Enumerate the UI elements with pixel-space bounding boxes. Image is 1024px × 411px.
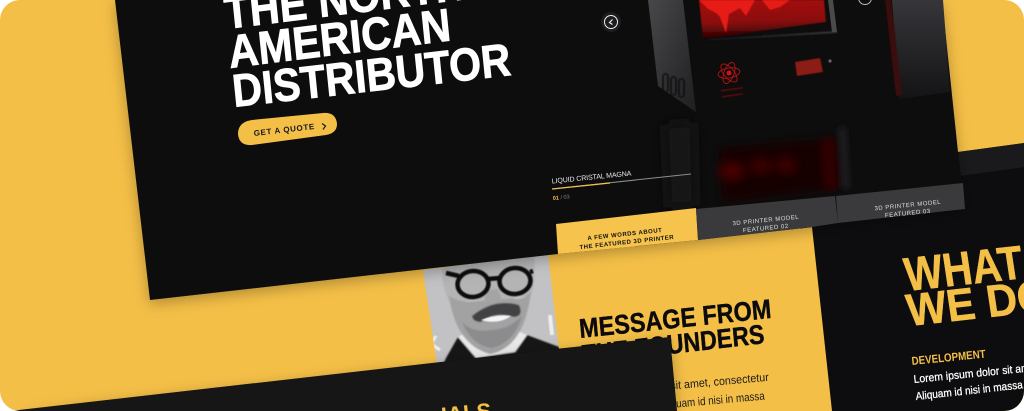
moustache	[472, 303, 521, 322]
printer side face	[648, 0, 696, 112]
nose shadow	[484, 289, 501, 300]
slider previous arrow	[601, 12, 621, 32]
hero heading	[222, 0, 513, 117]
logo caption	[721, 87, 743, 98]
jacket	[444, 334, 559, 362]
hero heading: DISTRIBUTOR	[230, 33, 513, 117]
red resin window	[699, 0, 826, 39]
white page marks	[431, 336, 440, 350]
text block: development copy	[914, 365, 1024, 401]
beard	[449, 292, 531, 354]
text block: founders copy: dolor sit amet, consectetur	[643, 372, 769, 395]
slider next arrow	[858, 0, 872, 4]
tab: featured 3D printer: A FEW WORDS ABOUT	[587, 228, 663, 242]
slide label: LIQUID CRISTAL MAGNA	[552, 171, 632, 185]
button: get a quote	[238, 113, 337, 145]
panel: hero	[115, 0, 965, 300]
atom logo	[718, 62, 740, 84]
tab: featured 3D printer: THE FEATURED 3D PRINTER	[579, 235, 675, 251]
panel: what we do	[800, 143, 1024, 411]
floor reflections	[669, 128, 691, 202]
tab: model 02: 3D PRINTER MODEL	[732, 215, 800, 227]
slide counter: 01 / 03	[553, 194, 570, 202]
slide progress	[552, 174, 691, 189]
tab: model 02	[696, 196, 838, 240]
tab: model 03: FEATURED 03	[885, 209, 931, 219]
tab: featured 3D printer	[556, 208, 698, 254]
heading: message from the founders	[580, 299, 771, 354]
tab: model 02: FEATURED 02	[743, 224, 789, 234]
tab: model 03: 3D PRINTER MODEL	[874, 200, 942, 212]
text block: founders copy: quam id nisi in massa	[670, 391, 766, 411]
subheading: development: DEVELOPMENT	[911, 349, 986, 368]
back wall	[892, 0, 950, 99]
glasses	[446, 266, 533, 299]
head	[442, 257, 534, 301]
founder portrait	[423, 255, 559, 362]
light strip under window	[705, 31, 838, 41]
shirt	[458, 330, 527, 358]
printer photograph	[648, 0, 950, 208]
heading: message from the founders: THE FOUNDERS	[581, 318, 766, 370]
panel: message from the founders	[400, 227, 832, 411]
panel: bottom	[10, 337, 677, 411]
heading: message from the founders: MESSAGE FROM	[578, 293, 773, 344]
text block: founders copy	[674, 374, 768, 408]
button: get a quote: GET A QUOTE	[253, 122, 315, 138]
display	[795, 58, 823, 76]
tab: model 03	[836, 183, 965, 223]
red reflection	[718, 138, 840, 202]
heading: what we do	[902, 246, 1024, 326]
